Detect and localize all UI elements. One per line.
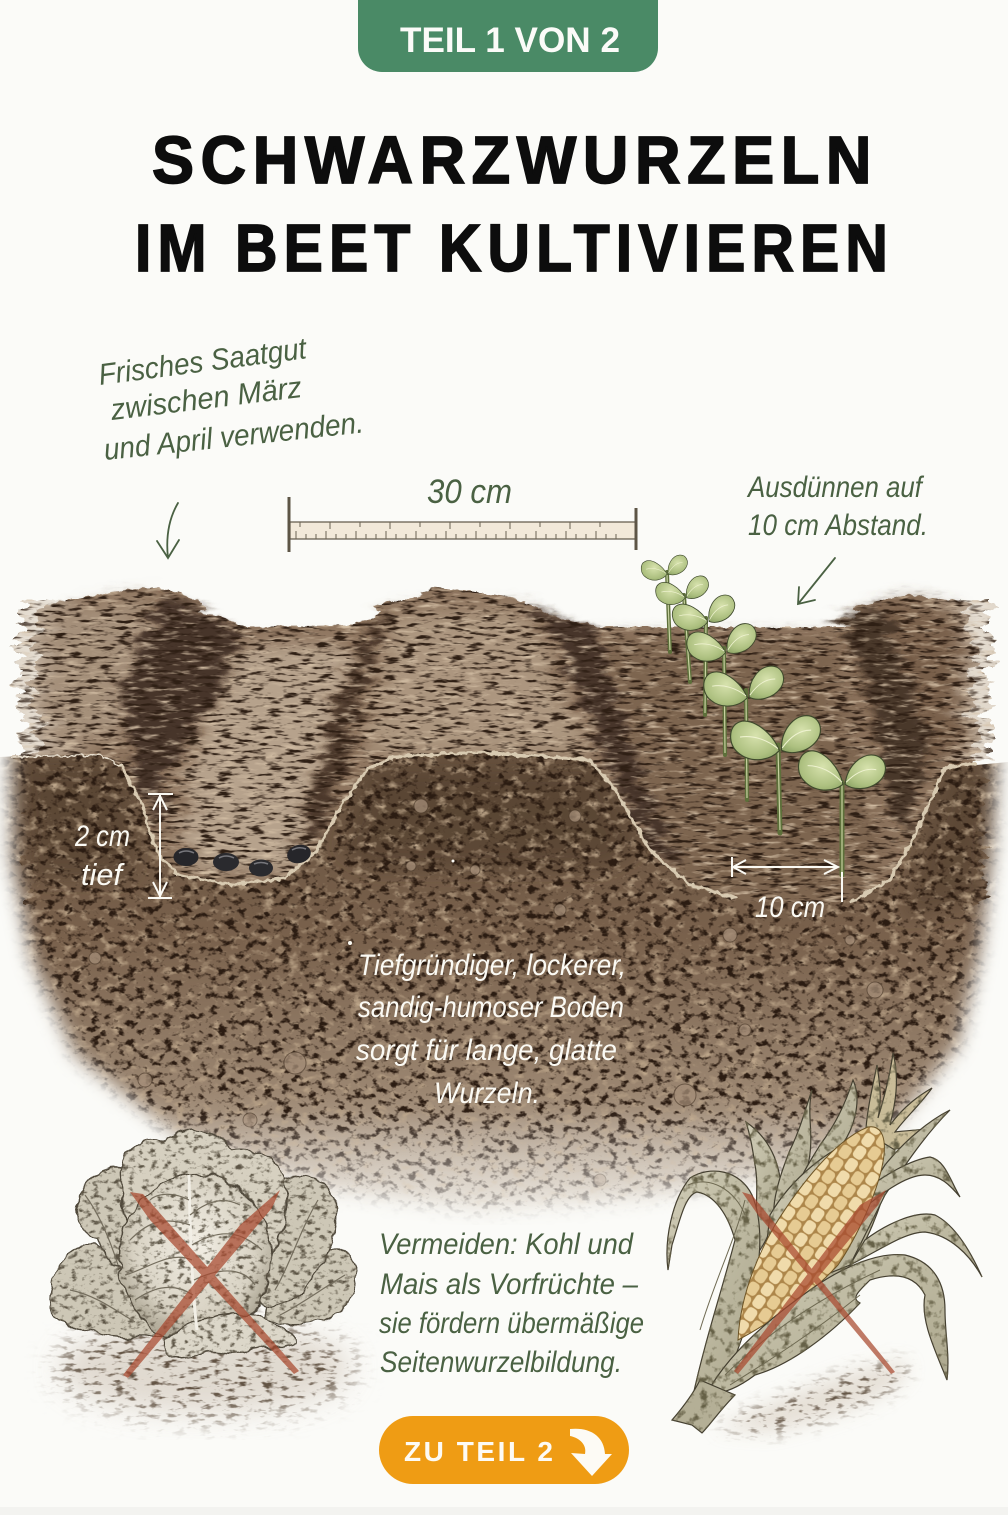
soil cross-section — [0, 745, 1008, 1230]
ruler with 30 cm label: 30 cm — [427, 473, 512, 511]
soil surface behind the cross-section — [20, 587, 990, 905]
button: to part 2 — [379, 1416, 629, 1484]
callout: fresh seed: zwischen März — [108, 371, 303, 427]
cob — [738, 1127, 884, 1340]
husk base — [672, 1380, 735, 1433]
cross mark — [123, 1190, 299, 1378]
button: to part 2: ZU TEIL 2 — [404, 1436, 553, 1467]
dark shading under furrow — [340, 770, 640, 870]
callout: fresh seed: und April verwenden. — [102, 406, 365, 467]
icon: curved arrow down — [570, 1429, 612, 1476]
avoid note: Vermeiden: Kohl und — [379, 1228, 634, 1261]
wall of centre ridge left — [305, 612, 388, 845]
seedlings in a row — [639, 551, 885, 875]
callout: thinning — [746, 471, 928, 542]
arrow: to seedlings — [798, 558, 835, 604]
pale rim along the trench profile — [10, 752, 975, 902]
pale left and right edges — [20, 600, 90, 760]
right ridge — [840, 600, 965, 800]
illustration: crossed-out cabbage — [20, 1130, 390, 1440]
cabbage soil patch — [38, 1304, 374, 1440]
soil note: sandig-humoser Boden — [358, 991, 624, 1024]
illustration: crossed-out corn — [667, 1053, 982, 1445]
soil note — [356, 949, 626, 1110]
upright leaves — [746, 1122, 781, 1250]
left furrow floor — [180, 645, 350, 870]
badge: part 1 of 2: TEIL 1 VON 2 — [400, 21, 620, 60]
husk veins — [688, 1182, 880, 1385]
avoid note — [379, 1228, 644, 1379]
avoid note: Mais als Vorfrüchte – — [380, 1268, 638, 1301]
title: IM BEET KULTIVIEREN — [135, 211, 894, 286]
right furrow right wall — [838, 606, 930, 840]
wall of centre ridge right — [535, 605, 680, 865]
soil note: sorgt für lange, glatte — [356, 1034, 617, 1067]
right leaves — [825, 1110, 950, 1275]
ruler with 30 cm label — [289, 473, 636, 552]
silk — [866, 1053, 932, 1150]
seeds in the furrow — [174, 842, 313, 876]
cabbage veins — [70, 1175, 345, 1330]
right furrow floor — [600, 640, 885, 905]
arrow: to furrow — [157, 503, 179, 558]
centre ridge top — [365, 610, 590, 755]
soil note: Wurzeln. — [434, 1077, 540, 1110]
avoid note: Seitenwurzelbildung. — [380, 1346, 622, 1379]
left ridge top — [50, 597, 150, 745]
soil note: Tiefgründiger, lockerer, — [358, 949, 626, 982]
title: SCHWARZWURZELN — [152, 123, 878, 198]
depth measure: 2 cm — [74, 794, 173, 898]
title — [135, 123, 894, 286]
cross mark — [734, 1190, 895, 1374]
spacing measure: 10 cm — [732, 857, 842, 924]
front leaf — [707, 1255, 948, 1393]
callout: thinning: Ausdünnen auf — [746, 471, 924, 504]
depth measure: 2 cm: 2 cm — [74, 820, 130, 853]
husk behind cob — [760, 1135, 895, 1300]
avoid note: sie fördern übermäßige — [379, 1307, 644, 1340]
callout: fresh seed — [97, 332, 365, 467]
badge: part 1 of 2 — [358, 0, 658, 72]
soil illustration — [0, 587, 1008, 1230]
depth measure: 2 cm: tief — [81, 857, 125, 892]
left leaf — [667, 1171, 760, 1405]
corn soil patch — [712, 1348, 918, 1445]
stones — [89, 799, 883, 1186]
left furrow dark wall — [122, 595, 240, 835]
callout: fresh seed: Frisches Saatgut — [97, 332, 310, 392]
spacing measure: 10 cm: 10 cm — [755, 891, 825, 924]
callout: thinning: 10 cm Abstand. — [748, 509, 928, 542]
